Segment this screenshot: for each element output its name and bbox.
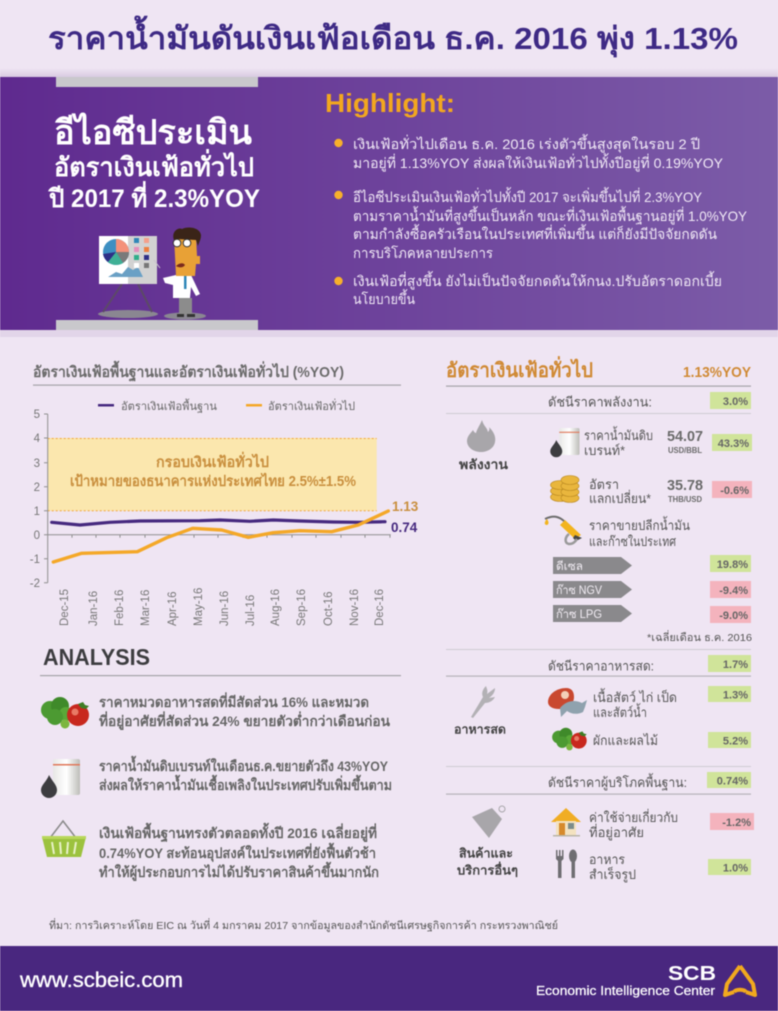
row: diesel: 19.8% <box>717 559 748 571</box>
bullet list: highlights: เงินเฟ้อที่สูงขึ้น ยังไม่เป็นปัจจัยกดดันให้กนง.ปรับอัตราดอกเบี้ย <box>353 271 722 290</box>
row: brent crude: 43.3% <box>718 438 749 450</box>
core inflation line <box>52 520 385 525</box>
x axis month labels: Dec-16 <box>374 589 386 626</box>
analysis text: fresh food <box>99 692 390 730</box>
row: LPG: -9.0% <box>719 610 748 622</box>
breakdown heading: อัตราเงินเฟ้อทั่วไป <box>446 355 593 382</box>
icon: shopping basket <box>42 821 86 857</box>
brand name: Economic Intelligence Center <box>536 983 716 998</box>
analysis text: core inflation: ทำให้ผู้ประกอบการไม่ได้ปรับราคาสินค้าขึ้นมากนัก <box>99 861 379 881</box>
breakdown heading: 1.13%YOY <box>683 364 751 381</box>
row: brent crude: เบรนท์* <box>584 443 625 458</box>
analysis text: brent oil: ราคาน้ำมันดิบเบรนท์ในเดือนธ.ค.ขยายตัวถึง 43%YOY <box>99 755 389 774</box>
y axis labels: 5 <box>34 409 40 421</box>
row: housing <box>551 808 754 841</box>
y axis labels: 1 <box>34 506 40 518</box>
target band <box>48 438 377 511</box>
row: vegetables and fruit: 5.2% <box>723 736 748 748</box>
analysis text: fresh food: ที่อยู่อาศัยที่สัดส่วน 24% ขยายตัวต่ำกว่าเดือนก่อน <box>99 711 390 730</box>
row: housing: ค่าใช้จ่ายเกี่ยวกับ <box>589 809 678 825</box>
y axis labels <box>30 409 41 590</box>
icon: wheat <box>471 686 495 718</box>
x axis month labels: Apr-16 <box>167 591 179 626</box>
analysis text: core inflation <box>99 822 379 881</box>
analysis text: core inflation: เงินเฟ้อพื้นฐานทรงตัวตลอดทั้งปี 2016 เฉลี่ยอยู่ที่ <box>99 822 377 843</box>
x axis month labels: May-16 <box>193 588 205 626</box>
bullet list: highlights <box>334 134 748 307</box>
x axis month labels: Jun-16 <box>219 591 231 626</box>
icon: flame <box>467 420 495 452</box>
analysis heading: ANALYSIS <box>43 644 150 670</box>
row: core CPI: 0.74% <box>717 776 748 788</box>
row: meat and fish: เนื้อสัตว์ ไก่ เป็ด <box>593 688 677 705</box>
chart heading: อัตราเงินเฟ้อพื้นฐานและอัตราเงินเฟ้อทั่วไป (%YOY) <box>33 360 344 382</box>
y axis labels: -2 <box>30 578 40 590</box>
y axis labels: -1 <box>30 554 40 566</box>
label: goods and services: บริการอื่นๆ <box>457 862 518 878</box>
row: diesel <box>553 555 751 574</box>
y axis labels: 2 <box>34 482 40 494</box>
x axis month labels: Aug-16 <box>270 589 282 626</box>
row: prepared food: อาหาร <box>589 852 625 867</box>
brand name: SCB <box>668 963 716 985</box>
y axis labels: 0 <box>34 530 40 542</box>
heading: EIC forecast: ปี 2017 ที่ 2.3%YOY <box>47 181 260 213</box>
label: energy: พลังงาน <box>459 457 508 472</box>
row: retail fuel prices: ราคาขายปลีกน้ำมัน <box>589 516 690 533</box>
x axis month labels: Jul-16 <box>245 595 257 626</box>
x axis month labels: Jan-16 <box>88 591 100 626</box>
x axis month labels: Sep-16 <box>296 589 308 626</box>
title: ราคาน้ำมันดันเงินเฟ้อเดือน ธ.ค. 2016 พุ่ง 1.13% <box>48 15 738 58</box>
row: meat and fish: และสัตว์น้ำ <box>593 703 647 720</box>
row: retail fuel prices <box>545 516 690 549</box>
row: core CPI <box>548 772 751 791</box>
panel: highlight banner <box>0 68 778 337</box>
analysis text: brent oil <box>99 755 392 793</box>
analysis text: fresh food: ราคาหมวดอาหารสดที่มีสัดส่วน 16% และหมวด <box>99 692 369 710</box>
row: prepared food <box>556 850 751 883</box>
footer <box>0 946 778 1011</box>
website: www.scbeic.com <box>19 969 183 992</box>
row: exchange rate: -0.6% <box>720 485 749 497</box>
row: exchange rate <box>550 476 752 506</box>
icon: SCB logo <box>725 966 755 995</box>
row: brent crude: USD/BBL <box>668 446 702 455</box>
bullet list: highlights: ตามราคาน้ำมันที่สูงขึ้นเป็นหลัก ขณะที่เงินเฟ้อพื้นฐานอยู่ที่ 1.0%YOY <box>353 206 748 225</box>
row: meat and fish <box>548 686 751 720</box>
source note: ที่มา: การวิเคราะห์โดย EIC ณ วันที่ 4 มกราคม 2017 จากข้อมูลของสำนักดัชนีเศรษฐกิจการค้า กระทรวงพาณิชย์ <box>49 918 558 932</box>
row: core CPI: ดัชนีราคาผู้บริโภคพื้นฐาน: <box>548 773 687 791</box>
analysis text: core inflation: 0.74%YOY สะท้อนอุปสงค์ในประเทศที่ยังฟื้นตัวช้า <box>99 842 376 862</box>
bullet list: highlights: อีไอซีประเมินเงินเฟ้อทั่วไปทั้งปี 2017 จะเพิ่มขึ้นไปที่ 2.3%YOY <box>353 187 703 205</box>
x axis month labels: Mar-16 <box>140 590 152 626</box>
row: brent crude <box>550 426 752 458</box>
panel: inflation line chart <box>30 360 419 626</box>
row: energy price index: ดัชนีราคาพลังงาน: <box>548 394 652 410</box>
row: fresh food index: 1.7% <box>723 659 748 671</box>
section: fresh food <box>454 655 751 750</box>
row: energy price index: 3.0% <box>723 396 748 408</box>
icon: vegetables and tomato <box>41 697 89 728</box>
row: exchange rate: อัตรา <box>589 477 619 492</box>
row: vegetables and fruit <box>552 728 751 750</box>
row: prepared food: 1.0% <box>723 862 748 874</box>
bullet list: highlights: เงินเฟ้อทั่วไปเดือน ธ.ค. 2016 เร่งตัวขึ้นสูงสุดในรอบ 2 ปี <box>353 134 700 153</box>
value label: 1.13: 1.13 <box>392 499 419 514</box>
x axis month labels: Oct-16 <box>323 591 335 626</box>
row: LPG: ก๊าซ LPG <box>556 608 602 621</box>
section: goods and services <box>457 772 754 883</box>
chart axes <box>44 414 391 583</box>
section: energy <box>459 392 752 644</box>
row: vegetables and fruit: ผักและผลไม้ <box>593 733 658 748</box>
row: meat and fish: 1.3% <box>723 690 748 702</box>
chart legend: อัตราเงินเฟ้อพื้นฐาน <box>121 398 217 413</box>
value label: 0.74: 0.74 <box>391 520 418 535</box>
chart legend: อัตราเงินเฟ้อทั่วไป <box>268 398 355 413</box>
target band: กรอบเงินเฟ้อทั่วไป <box>156 451 269 471</box>
row: housing: ที่อยู่อาศัย <box>589 824 644 841</box>
footnote: *เฉลี่ยเดือน ธ.ค. 2016 <box>647 630 752 644</box>
x axis month labels: Feb-16 <box>114 590 126 626</box>
heading: Highlight: Highlight: <box>325 88 455 118</box>
x axis month labels: Nov-16 <box>349 589 361 626</box>
row: housing: -1.2% <box>722 817 751 829</box>
x axis month labels: Dec-15 <box>59 589 71 626</box>
analysis text: brent oil: ส่งผลให้ราคาน้ำมันเชื้อเพลิงในประเทศปรับเพิ่มขึ้นตาม <box>99 774 392 793</box>
label: goods and services <box>457 846 518 878</box>
row: exchange rate: แลกเปลี่ยน* <box>589 490 651 506</box>
row: fresh food index: ดัชนีราคาอาหารสด: <box>548 658 654 674</box>
row: NGV <box>553 581 751 598</box>
row: brent crude: ราคาน้ำมันดิบ <box>584 426 653 443</box>
brand name <box>536 963 716 998</box>
row: retail fuel prices: และก๊าซในประเทศ <box>589 534 677 549</box>
breakdown heading <box>446 355 751 382</box>
y axis labels: 3 <box>34 458 40 470</box>
icon: oil can <box>41 759 80 798</box>
row: energy price index <box>548 392 751 410</box>
bullet list: highlights: การบริโภคหลายประการ <box>353 245 493 261</box>
row: fresh food index <box>548 655 751 674</box>
heading: EIC forecast <box>47 112 260 213</box>
row: NGV: -9.4% <box>719 585 748 597</box>
row: NGV: ก๊าซ NGV <box>556 584 602 597</box>
row: exchange rate: 35.78 <box>667 477 703 494</box>
icon: price tag <box>472 806 505 838</box>
bullet list: highlights: มาอยู่ที่ 1.13%YOY ส่งผลให้เงินเฟ้อทั่วไปทั้งปีอยู่ที่ 0.19%YOY <box>353 153 724 172</box>
panel: inflation breakdown <box>446 355 754 883</box>
bullet list: highlights: ตามกำลังซื้อครัวเรือนในประเทศที่เพิ่มขึ้น แต่ก็ยังมีปัจจัยกดดัน <box>353 224 717 242</box>
chart legend <box>98 398 355 413</box>
heading: EIC forecast: อัตราเงินเฟ้อทั่วไป <box>54 148 254 182</box>
label: fresh food: อาหารสด <box>454 722 506 736</box>
row: prepared food: สำเร็จรูป <box>589 865 636 883</box>
heading: EIC forecast: อีไอซีประเมิน <box>54 112 252 152</box>
target band: เป้าหมายของธนาคารแห่งประเทศไทย 2.5%±1.5% <box>70 472 356 490</box>
row: LPG <box>553 605 751 623</box>
row: diesel: ดีเซล <box>556 560 583 573</box>
row: brent crude: 54.07 <box>667 428 703 445</box>
panel: analysis <box>40 644 401 881</box>
label: goods and services: สินค้าและ <box>459 846 513 860</box>
bullet list: highlights: นโยบายขึ้น <box>353 289 415 307</box>
headline inflation line <box>53 511 388 562</box>
icon: presenter with chart board <box>98 227 206 320</box>
row: exchange rate: THB/USD <box>668 495 702 504</box>
x axis month labels <box>59 588 386 626</box>
y axis labels: 4 <box>34 433 41 445</box>
